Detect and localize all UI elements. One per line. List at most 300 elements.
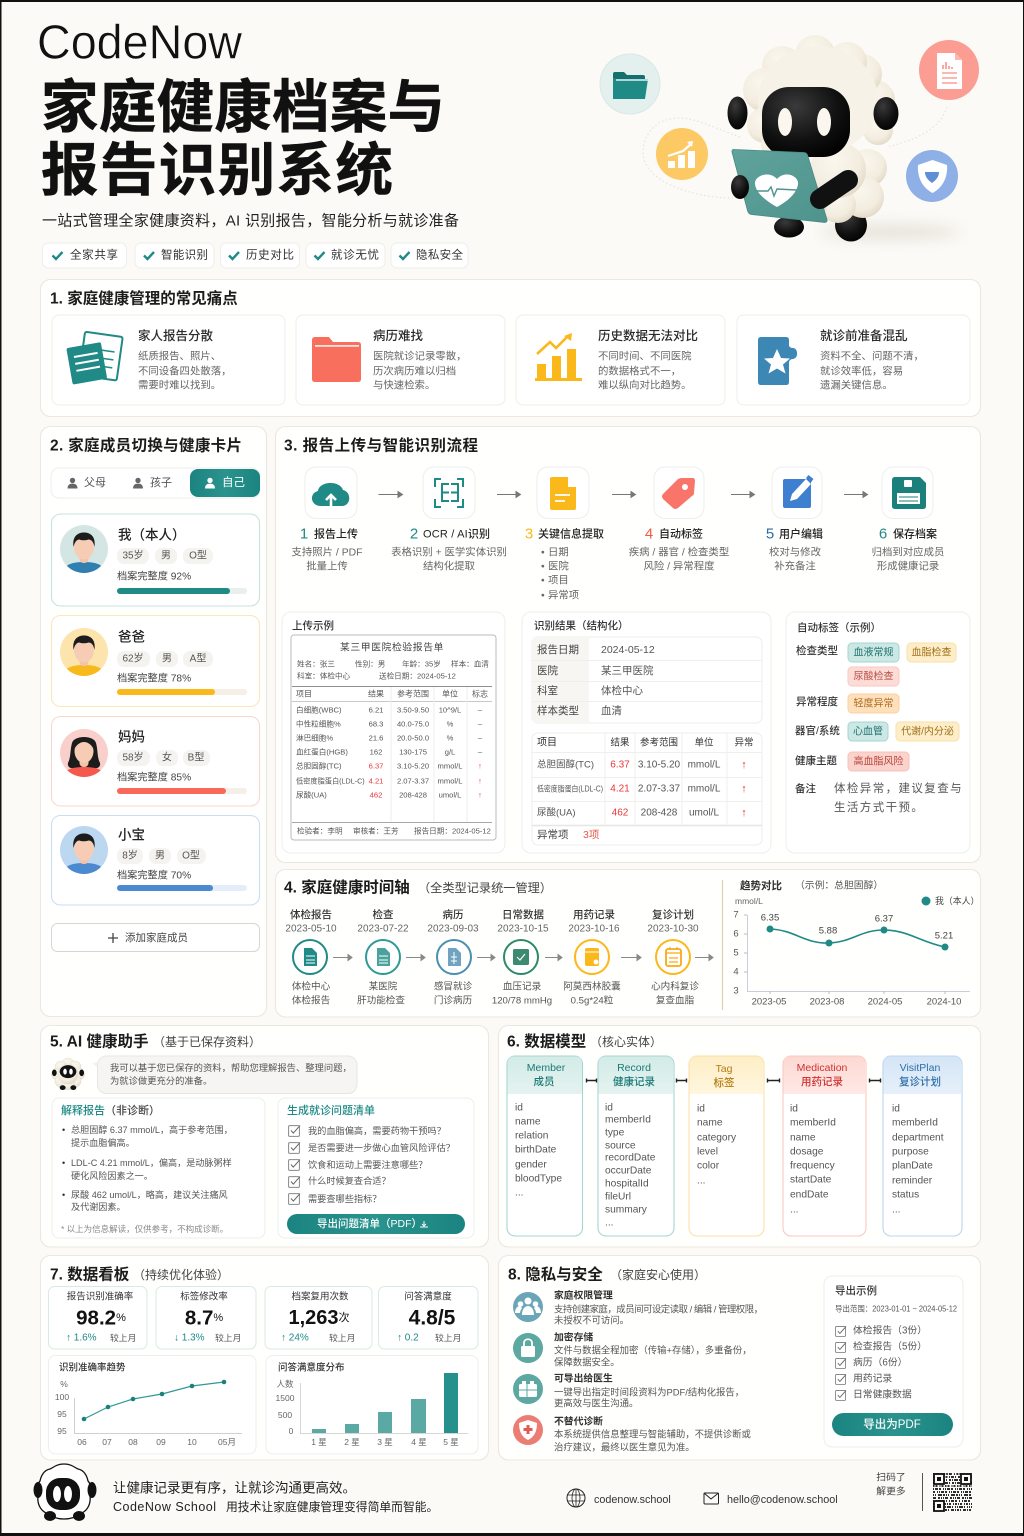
card: father: A型 [190,652,206,664]
item: permissions: 家庭权限管理 [554,1288,613,1302]
card: visit prep chaos: 资料不全、问题不清， [820,350,924,362]
card: visit prep chaos [737,315,970,405]
subtitle: 一站式管理全家健康资料，AI 识别报告，智能分析与就诊准备 [42,212,459,230]
KPI: satisfaction: 问答满意度 [404,1290,452,1302]
card: records hard to find: 历次病历难以归档 [373,364,456,378]
report sheet: 总胆固醇(TC) [296,760,342,770]
report sheet: 21.6 [369,734,383,742]
step 2 OCR: 2 [410,526,418,542]
step 1 upload: 支持照片 / PDF [291,546,363,558]
KPI: tag edit rate: 8.7% [185,1306,223,1330]
report sheet: 208-428 [399,790,427,800]
entity: Tag: id [697,1104,705,1114]
report sheet: 参考范围 [397,688,429,698]
KPI: recognition accuracy: 98.2% [76,1306,126,1330]
node: follow-up [647,908,699,1006]
card: me [52,514,260,606]
card: history not comparable: 难以纵向对比趋势。 [598,378,692,392]
report sheet: 标志 [472,688,488,698]
feature chips: 隐私安全 [416,248,464,262]
tabs: 自己 [222,476,245,489]
results table: mmol/L [688,784,721,794]
export sample card: 用药记录 [853,1372,892,1384]
report sheet: 3.10-5.20 [397,762,429,770]
node: medical record [427,908,479,1006]
trend chart: 3 [733,986,739,996]
node: follow-up: 复诊计划 [652,908,694,921]
node: medical record: 病历 [442,908,464,921]
entity: VisitPlan: planDate [892,1160,933,1172]
tags: exam type: 检查类型 [796,644,838,657]
step 3 extraction: • [541,576,545,586]
card: interpretation [52,1098,265,1238]
node: medication: 0.5g*24粒 [571,994,614,1006]
node: imaging: 某医院 [369,980,398,992]
icon: shield bubble [906,150,958,202]
step 3 extraction: • [541,590,545,602]
icon: report bubble [919,40,979,100]
arrow [333,954,352,960]
results table: 尿酸(UA) [537,806,576,818]
tabs [51,468,260,498]
step 3 extraction: 异常项 [548,588,579,602]
legend: 我（本人） [935,895,979,906]
results table: 总胆固醇(TC) [537,758,594,770]
report sheet: 单位 [442,688,458,698]
tags: organ [795,722,959,741]
KPI: satisfaction: 较上月 [435,1332,461,1343]
card: interpretation: 及代谢因素。 [71,1201,126,1212]
trend chart: 7 [733,910,739,920]
report sheet: ↑ [478,762,482,770]
trend chart: 5 [733,948,739,958]
footer slogan: CodeNow School [113,1500,216,1514]
entity: Medication: id [790,1104,798,1114]
trend chart: 2024-05 [868,996,902,1008]
card: question list [278,1098,474,1238]
node: daily data [492,908,552,1006]
report sheet: 样本：血清 [451,658,489,668]
card: father: 62岁 [122,652,144,664]
trend chart: （示例：总胆固醇） [795,878,883,892]
KPI: recognition accuracy [48,1286,147,1349]
entity: Record: type [605,1128,625,1138]
sub-panel: auto tags: 自动标签（示例） [797,621,881,634]
step 4 auto tags: 自动标签 [659,526,703,540]
heading: 5. AI 健康助手 [50,1032,148,1050]
node: medication: 2023-10-16 [568,924,620,934]
report sheet: 6.21 [369,706,383,714]
footer mascot [34,1464,96,1521]
entity: VisitPlan: reminder [892,1176,933,1186]
tags: topic: 高血脂风险 [854,754,904,768]
main title [41,76,445,203]
scan text: 解更多 [876,1484,906,1498]
trend chart: 6.35 [761,912,779,924]
KPI: reuse count: ↑ 24% [281,1332,309,1344]
step 3 extraction: 3 [525,526,533,542]
card: interpretation: • [62,1190,65,1200]
entity: Medication: 用药记录 [801,1076,843,1088]
entity: Record: id [605,1102,613,1114]
report sheet: 白细胞(WBC) [296,704,342,714]
card: interpretation: * 以上为信息解读，仅供参考，不构成诊断。 [61,1224,228,1234]
card: records hard to find: 医院就诊记录零散， [373,350,467,362]
report sheet: 10^9/L [439,706,461,714]
node: daily data: 血压记录 [503,980,542,992]
panel 5: AI assistant [40,1026,488,1247]
entity: VisitPlan: ... [892,1204,900,1216]
card: visit prep chaos: 就诊前准备混乱 [820,328,908,343]
entity: VisitPlan [883,1056,962,1236]
report sheet [291,635,496,840]
report sheet: 送检日期：2024-05-12 [379,670,456,680]
icon: documents [66,332,123,385]
bar chart: satisfaction distribution: 4 星 [411,1437,427,1447]
results table: 单位 [694,736,714,748]
entity: Medication: frequency [790,1160,836,1172]
node: imaging: 2023-07-22 [357,924,409,934]
entity: Medication: ... [790,1204,798,1216]
mascot small [51,1058,85,1090]
export sample card: 日常健康数据 [853,1388,912,1400]
card: scattered reports: 纸质报告、照片、 [138,350,221,362]
line chart: accuracy trend: 10 [187,1437,197,1447]
report sheet: 性别：男 [355,658,385,668]
meta table: 2024-05-12 [601,644,655,656]
card: me: 我（本人） [118,528,186,542]
entity: Tag: name [697,1118,723,1128]
arrow [731,492,754,498]
results table: ↑ [741,783,747,795]
KPI: reuse count: 档案复用次数 [291,1290,349,1302]
report sheet: – [478,748,483,756]
KPI: recognition accuracy: 报告识别准确率 [67,1290,134,1302]
results table: 3.10-5.20 [638,760,681,770]
heading: 6. 数据模型 [507,1032,586,1050]
report sheet: 3.50-9.50 [397,706,429,714]
step 6 save: 形成健康记录 [877,560,939,572]
node: physical exam: 2023-05-10 [285,924,337,934]
entity: VisitPlan: id [892,1104,900,1114]
card: history not comparable: 历史数据无法对比 [598,328,698,343]
card: scattered reports: 家人报告分散 [138,328,214,343]
bar chart: satisfaction distribution: 2 星 [344,1437,360,1447]
node: imaging: 肝功能检查 [357,994,405,1006]
main title: 家庭健康档案与 [41,76,445,140]
report sheet: 2.07-3.37 [397,776,429,786]
feature chips: 全家共享 [70,248,118,262]
KPI: satisfaction: 4.8/5 [409,1306,456,1330]
card: question list: 需要查哪些指标？ [308,1193,382,1204]
sub-panel: structured result [522,612,771,853]
meta table [532,637,762,723]
speech bubble: 为就诊做更充分的准备。 [110,1075,212,1086]
report sheet: 68.3 [369,720,383,728]
heading: （全类型记录统一管理） [418,880,552,895]
entity: Tag [689,1056,764,1236]
legend [922,895,979,906]
meta table: 科室 [537,684,558,697]
arrow [695,954,713,960]
results table: 项目 [537,736,557,748]
step 3 extraction: • [541,548,545,558]
results table: 结果 [610,736,630,748]
meta table: 某三甲医院 [601,664,654,677]
bar chart: satisfaction distribution: 1500 [276,1393,295,1403]
report sheet: % [447,734,454,742]
line chart: accuracy trend: 06 [77,1437,87,1447]
trend chart: 2023-05 [752,996,786,1008]
entity: Tag: Tag [716,1063,733,1075]
report sheet: 淋巴细胞% [296,732,333,742]
panel 2: family switch and health cards [40,426,266,1016]
card: question list: 我的血脂偏高，需要药物干预吗？ [308,1125,446,1136]
footer [34,1464,972,1521]
KPI: reuse count: 较上月 [329,1332,355,1343]
tags: exam type [796,643,956,686]
step 6 save: 保存档案 [893,526,937,540]
KPI: reuse count [265,1286,372,1349]
trend chart: 4 [733,966,739,978]
report sheet: 姓名：张三 [297,658,335,668]
KPI: satisfaction: ↑ 0.2 [397,1332,419,1344]
panel 3: upload and recognition flow [276,426,980,862]
results table: 异常 [734,736,754,748]
export sample card: 体检报告（3份） [853,1324,927,1336]
entity: Member: relation [515,1130,548,1142]
arrow [612,492,636,498]
card: father [52,616,260,706]
bar chart: satisfaction distribution: 5 星 [443,1437,459,1447]
step 6 save: 归档到对应成员 [872,546,944,558]
icon: document [550,477,576,510]
entity: VisitPlan: memberId [892,1118,938,1128]
connector [676,1078,687,1082]
results table: 4.21 [610,784,630,794]
results table: ↑ [741,807,747,819]
report sheet: mmol/L [438,776,462,786]
results table: 低密度脂蛋白(LDL-C) [537,784,603,794]
KPI: tag edit rate: 标签修改率 [180,1290,228,1302]
arrow [406,954,425,960]
card: child: 小宝 [118,826,145,842]
speech bubble: 我可以基于您已保存的资料，帮助您理解报告、整理问题， [110,1062,352,1073]
footer slogan [113,1480,438,1514]
line chart: accuracy trend: 09 [156,1437,166,1447]
step 2 OCR: OCR / AI识别 [423,526,490,540]
step 3 extraction: 医院 [548,560,569,572]
sub-panel: structured result: 识别结果（结构化） [534,619,628,632]
add member button [52,924,260,952]
report sheet: 40.0-75.0 [397,720,429,728]
trend chart: 6 [733,928,739,940]
QR code [933,1474,972,1511]
results table: 6.37 [610,760,630,770]
icon: puzzle star [758,337,797,385]
item: encryption [513,1330,752,1368]
node: medication [563,909,621,1006]
card: child: O型 [182,848,200,862]
arrow [378,492,402,498]
sub-panel: upload sample: 上传示例 [292,619,334,632]
card: interpretation: 解释报告（非诊断） [61,1103,160,1117]
report sheet: 4.21 [369,776,383,786]
panel 8: privacy and security [498,1256,980,1460]
report sheet: – [478,720,483,728]
step 3 extraction: • [541,562,545,572]
step 2 OCR: 表格识别 + 医学实体识别 [391,546,507,558]
entity: Member: birthDate [515,1144,557,1156]
avatar [60,525,108,573]
item: permissions: 未授权不可访问。 [554,1314,629,1326]
heading: （核心实体） [590,1034,662,1049]
tags: organ: 代谢/内分泌 [901,724,954,738]
meta table: 血清 [601,704,622,717]
entity: Record: fileUrl [605,1192,631,1202]
entity: Record: 健康记录 [613,1075,655,1088]
icon: tag [662,478,695,509]
item: encryption: 加密存储 [554,1330,593,1344]
icon: folder [312,337,361,382]
card: interpretation: • [62,1158,65,1168]
heading: 4. 家庭健康时间轴 [284,878,410,896]
entity: Record: occurDate [605,1166,652,1176]
tags: exam type: 尿酸检查 [854,670,894,682]
line chart: accuracy trend: 95 [57,1426,67,1436]
step 1 upload: 批量上传 [306,560,348,572]
node: physical exam: 体检中心 [292,980,331,992]
arrow [844,492,868,498]
results table: 208-428 [641,808,678,818]
card: visit prep chaos: 遗漏关键信息。 [820,378,893,392]
note: 备注 [795,782,816,795]
panel 4: health timeline and trend [276,870,980,1017]
line chart: accuracy trend: 95 [57,1409,67,1419]
panel 1: common pain points [40,280,980,416]
item: encryption: 文件与数据全程加密（传输+存储），多重备份， [554,1344,752,1356]
heading [507,1032,662,1050]
heading: 3. 报告上传与智能识别流程 [284,436,478,454]
card: mother: B型 [188,750,204,764]
report sheet: 报告日期：2024-05-12 [414,826,491,836]
entity: Member: Member [527,1062,566,1074]
report sheet: 结果 [368,688,384,698]
node: follow-up: 复查血脂 [656,994,695,1006]
header: logo and title [37,16,468,268]
KPI: reuse count: 1,263次 [288,1307,350,1329]
entity: Medication: dosage [790,1146,824,1158]
step 3 extraction: 日期 [548,546,569,558]
report sheet: 20.0-50.0 [397,734,429,742]
heading [508,1264,706,1284]
entity: Member: id [515,1102,523,1114]
report sheet: 审核者：王芳 [353,826,399,836]
card: interpretation: LDL-C 4.21 mmol/L，偏高，是动脉粥样 [71,1157,232,1168]
report sheet: ↑ [478,776,482,786]
avatar [60,628,108,676]
entity: Record: summary [605,1204,648,1216]
arrow [545,954,562,960]
KPI: recognition accuracy: ↑ 1.6% [66,1332,97,1344]
node: physical exam: 体检报告 [290,908,332,921]
node: medical record: 门诊病历 [434,994,473,1006]
scan text [876,1470,906,1498]
step 3 extraction: 项目 [548,574,569,586]
tags: severity: 轻度异常 [854,696,894,710]
item: export to doctor: 可导出给医生 [554,1372,613,1384]
step 1 upload: 报告上传 [314,526,358,540]
node: physical exam [285,908,337,1006]
KPI: tag edit rate: ↓ 1.3% [174,1332,205,1344]
step 3 extraction: 关键信息提取 [538,526,604,540]
entity: Record [598,1056,674,1236]
export sample card: 病历（6份） [853,1356,907,1368]
arrow [621,954,641,960]
note: 生活方式干预。 [834,800,924,814]
heading: 8. 隐私与安全 [508,1264,603,1284]
report sheet: ↑ [478,790,482,800]
meta table: 样本类型 [537,704,579,717]
add member button: 添加家庭成员 [125,931,188,944]
entity: Member: gender [515,1160,547,1170]
card: me: 35岁 [122,548,144,562]
entity: Member: bloodType [515,1174,562,1184]
website [567,1489,671,1507]
bar chart: satisfaction distribution [266,1356,478,1454]
card: mother: 女 [162,750,172,764]
heading: （基于已保存资料） [153,1035,261,1049]
tabs: 孩子 [150,476,172,489]
tags: severity: 异常程度 [796,695,838,708]
entity: Medication [783,1056,866,1236]
export sample card: 检查报告（5份） [853,1340,927,1352]
card: mother [52,716,260,806]
results table: 参考范围 [640,736,678,748]
card: interpretation: • [62,1125,65,1135]
export button: 导出问题清单（PDF） [317,1217,422,1230]
trend chart: 2024-10 [927,996,961,1008]
report sheet: 血红蛋白(HGB) [296,746,348,756]
card: question list: 饮食和运动上需要注意哪些？ [308,1159,427,1170]
feature chips: 历史对比 [246,248,294,262]
meta table: 报告日期 [537,643,579,656]
step 4 auto tags [629,467,729,572]
export sample card: 导出范围：2023-01-01 ~ 2024-05-12 [835,1304,957,1314]
results table: umol/L [689,808,719,818]
entity: VisitPlan: VisitPlan [900,1062,940,1074]
step 4 auto tags: 疾病 / 器官 / 检查类型 [629,546,729,558]
export button: 导出为PDF [863,1417,921,1431]
node: daily data: 日常数据 [502,908,544,921]
step 3 extraction [525,467,604,602]
step 6 save [872,467,944,572]
card: history not comparable: 不同时间、不同医院 [598,350,692,362]
KPI: tag edit rate [156,1286,256,1349]
email: hello@codenow.school [727,1494,838,1506]
entity: Tag: category [697,1132,737,1144]
card: question list: 什么时候复查合适？ [308,1175,391,1186]
item: encryption: 保障数据安全。 [554,1356,620,1368]
heading: 1. 家庭健康管理的常见痛点 [50,288,238,308]
heading: 7. 数据看板 [50,1266,130,1284]
speech bubble [92,1056,357,1094]
bar chart: satisfaction distribution: 问答满意度分布 [278,1362,345,1374]
entity: VisitPlan: department [892,1132,944,1144]
node: daily data: 120/78 mmHg [492,996,552,1006]
card: me: 档案完整度 92% [117,570,191,582]
tabs: 父母 [84,476,106,489]
